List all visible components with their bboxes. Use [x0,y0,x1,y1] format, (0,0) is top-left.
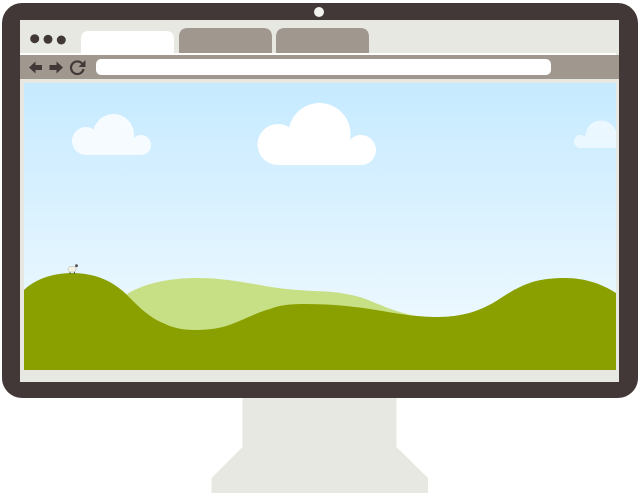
cloud left [72,114,151,155]
window control dots [30,34,66,44]
sky [24,83,616,317]
sheep [68,264,78,274]
cloud centre [258,103,376,165]
icon: forward arrow [50,62,63,74]
webcam dot [314,7,324,17]
tab strip underline [20,53,616,55]
monitor stand [212,397,428,493]
icon: reload [71,60,86,74]
inactive tab 1 [179,28,272,53]
front hill [24,273,616,370]
back hill [126,278,415,330]
screen scene [24,83,620,370]
cloud right [574,120,616,148]
active tab [81,31,174,55]
toolbar [20,55,619,79]
browser window [20,20,619,382]
inactive tab 2 [276,28,369,53]
icon: back arrow [29,62,42,74]
address bar [96,59,551,75]
monitor bezel [2,3,638,398]
